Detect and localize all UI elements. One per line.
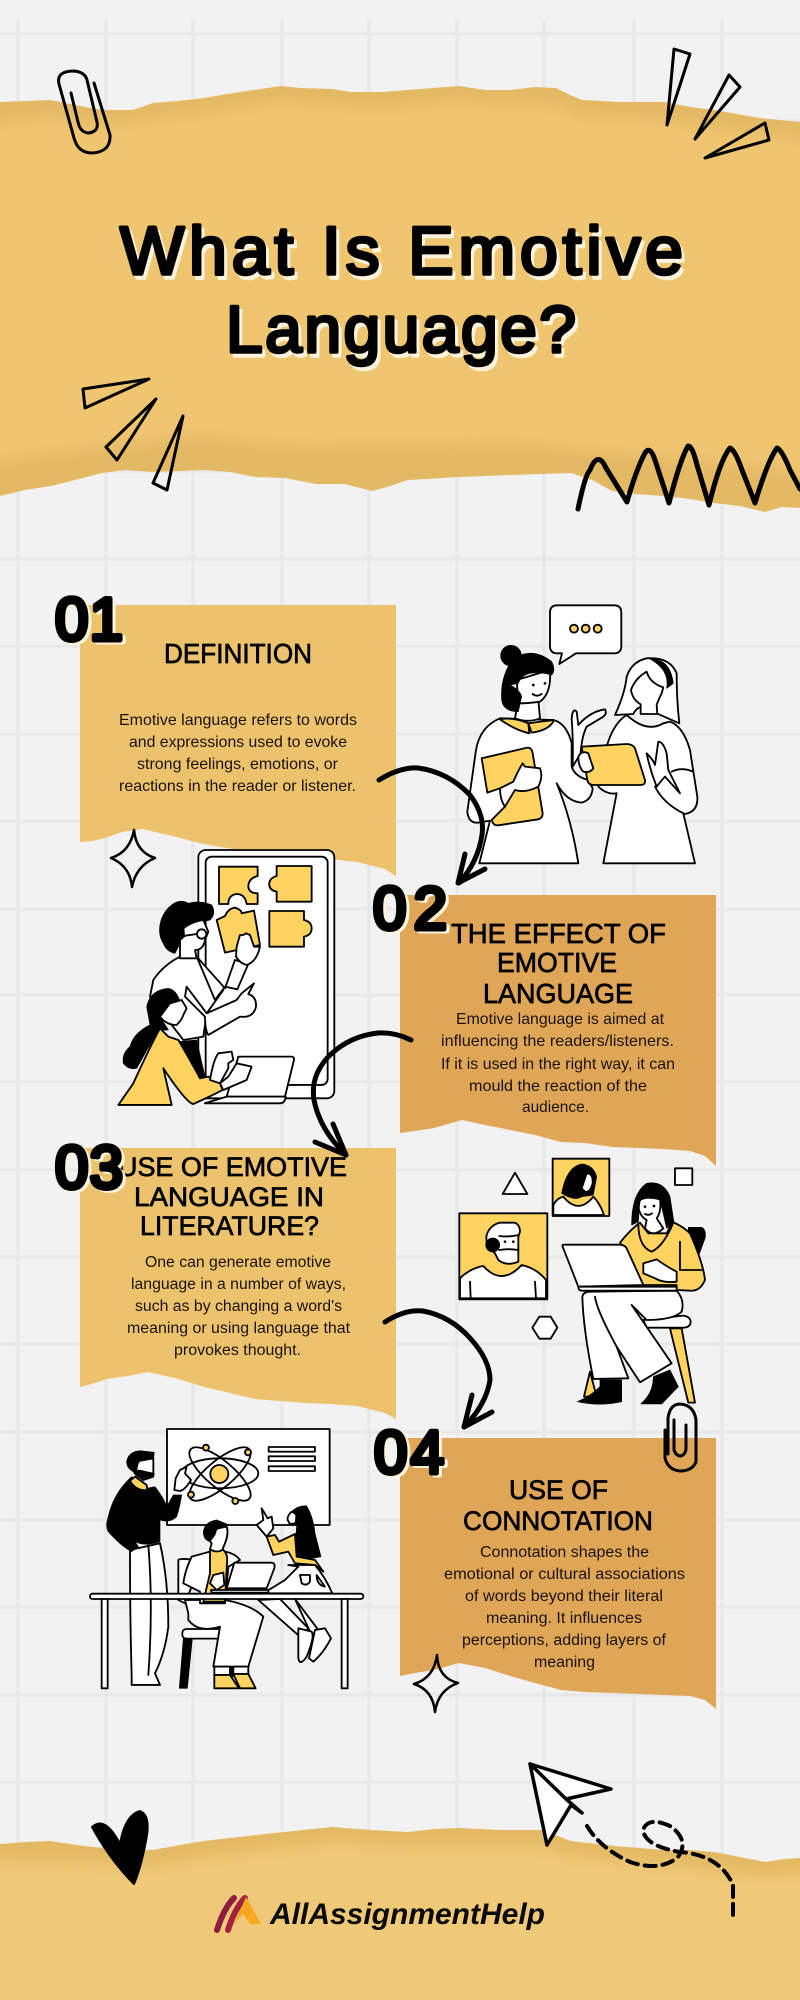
icon: square — [675, 1168, 692, 1185]
icon: hexagon — [532, 1317, 557, 1339]
text: effect body: audience. — [522, 1099, 589, 1116]
top torn paper banner — [0, 86, 800, 512]
tablet held between the women — [578, 744, 645, 785]
illustration: two people at puzzle phone — [118, 850, 334, 1105]
panel: use of emotive language in literature — [80, 1148, 396, 1419]
icon: speech bubble — [550, 605, 621, 664]
text: effect body: If it is used in the right way, it can — [441, 1056, 675, 1073]
arrow: definition to effect — [379, 768, 485, 883]
icon: paper plane — [530, 1764, 611, 1845]
text: effect body — [441, 1011, 675, 1116]
panel: use of connotation — [400, 1438, 716, 1709]
illustration: two women talking — [467, 605, 697, 863]
figure: left woman — [467, 645, 606, 863]
number 03: 03 — [55, 1134, 123, 1201]
text: connotation body: perceptions, adding layers of — [462, 1632, 667, 1649]
icon: paperclip lower right — [665, 1404, 696, 1471]
icon: zigzag — [578, 446, 800, 509]
text: literature body: meaning or using language that — [127, 1320, 351, 1337]
heading: literature: LITERATURE? — [140, 1211, 319, 1241]
icon: heart — [92, 1811, 148, 1884]
icon: rays left — [83, 379, 183, 490]
figure: seated woman — [562, 1183, 705, 1404]
heading: definition: DEFINITION — [164, 638, 312, 669]
text: connotation body: meaning. It influences — [486, 1610, 642, 1627]
heading: literature: USE OF EMOTIVE — [118, 1152, 347, 1182]
title: Language? — [226, 292, 576, 366]
title — [120, 213, 683, 366]
text: literature body: language in a number of ways, — [131, 1276, 346, 1293]
heading: literature: LANGUAGE IN — [134, 1182, 324, 1212]
puzzle pieces — [217, 866, 312, 953]
logo mark — [217, 1897, 261, 1930]
text: effect body: mould the reaction of the — [469, 1078, 647, 1095]
text: definition body — [119, 712, 357, 795]
text: effect body: influencing the readers/listeners. — [441, 1033, 674, 1050]
table — [90, 1594, 363, 1688]
icon: sparkle left — [111, 830, 155, 887]
video tile: man — [459, 1213, 547, 1299]
arrow: literature to connotation — [385, 1311, 492, 1427]
text: literature body: provokes thought. — [174, 1342, 301, 1359]
board — [167, 1429, 330, 1525]
heading: effect: LANGUAGE — [483, 978, 633, 1009]
illustration: team around a table — [90, 1429, 363, 1688]
heading: connotation: USE OF — [509, 1475, 608, 1505]
number 02: 02 — [373, 875, 447, 942]
text: definition body: reactions in the reader or listener. — [119, 778, 356, 795]
text: literature body: One can generate emotive — [145, 1254, 331, 1271]
heading: effect — [451, 918, 666, 1009]
number 04: 04 — [374, 1419, 444, 1486]
text: effect body: Emotive language is aimed at — [456, 1011, 665, 1028]
text: connotation body: Connotation shapes the — [480, 1544, 649, 1561]
text: definition body: strong feelings, emotions, or — [137, 756, 339, 773]
figure: man standing — [107, 1451, 191, 1685]
figure: man seated — [178, 1520, 275, 1688]
illustration: video call woman — [459, 1159, 705, 1404]
icon: sparkle right — [414, 1655, 458, 1712]
heading: connotation: CONNOTATION — [463, 1506, 653, 1536]
figure: woman with yellow sweater — [118, 988, 223, 1105]
text: connotation body: emotional or cultural associations — [444, 1566, 685, 1583]
text: connotation body: of words beyond their literal — [465, 1588, 663, 1605]
icon: paperclip top left — [59, 71, 110, 153]
heading: literature — [118, 1152, 347, 1241]
title: What Is Emotive — [120, 213, 683, 289]
panel: definition — [80, 605, 396, 876]
logo text: AllAssignmentHelp — [269, 1898, 545, 1931]
video tile: woman — [553, 1159, 609, 1216]
figure: right woman — [598, 658, 697, 863]
bottom torn paper banner — [0, 1827, 800, 2000]
heading: effect: EMOTIVE — [497, 947, 617, 978]
text: connotation body: meaning — [534, 1654, 595, 1671]
text: definition body: and expressions used to evoke — [129, 734, 347, 751]
panel: the effect of emotive language — [400, 895, 716, 1166]
text: connotation body — [444, 1544, 685, 1671]
number 01: 01 — [55, 586, 123, 653]
phone — [198, 850, 334, 1098]
heading: effect: THE EFFECT OF — [451, 918, 666, 949]
text: definition body: Emotive language refers to words — [119, 712, 357, 729]
heading: connotation — [463, 1475, 653, 1536]
text: literature body — [127, 1254, 351, 1359]
dashed trail — [587, 1822, 733, 1917]
figure: woman pointing — [257, 1506, 332, 1662]
arrow: effect to literature — [313, 1033, 411, 1155]
text: literature body: such as by changing a word's — [135, 1298, 342, 1315]
laptop — [205, 1052, 294, 1103]
logo — [217, 1897, 545, 1931]
icon: triangle — [503, 1173, 527, 1194]
figure: man with glasses — [150, 901, 260, 1040]
icon: rays top right — [667, 49, 769, 158]
